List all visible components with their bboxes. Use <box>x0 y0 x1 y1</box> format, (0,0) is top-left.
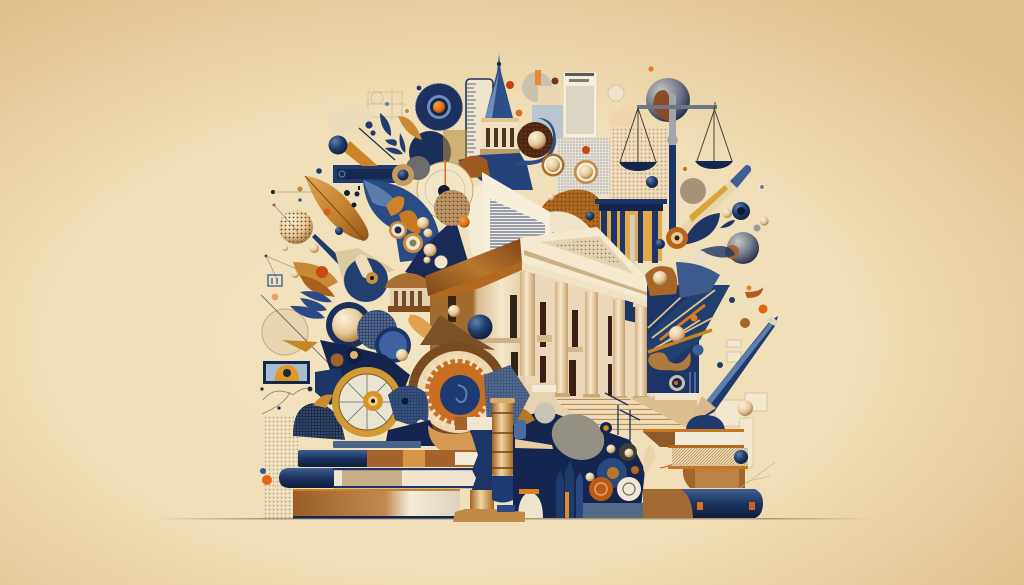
ring sphere left <box>542 154 564 176</box>
ring disc <box>403 233 423 253</box>
radial fan left <box>335 248 395 288</box>
book D <box>643 489 763 518</box>
book small centre <box>455 417 493 430</box>
book page left <box>482 172 550 258</box>
ball: cream right <box>759 216 769 226</box>
bronze crest <box>458 156 490 178</box>
dot blue <box>260 468 266 474</box>
cream round <box>692 250 708 266</box>
courthouse <box>425 227 697 440</box>
ring backdrop <box>262 309 308 355</box>
navy ball <box>655 239 665 249</box>
navy block <box>647 285 699 393</box>
ground line <box>155 518 875 520</box>
capsule <box>408 315 441 343</box>
gavel neck <box>470 490 494 512</box>
stairs <box>555 397 690 432</box>
cream ball <box>669 326 685 342</box>
sphere speckled <box>279 210 313 244</box>
book text block <box>490 199 545 250</box>
cream ball lower <box>416 420 426 428</box>
gavel cap <box>490 398 515 403</box>
roof wood <box>425 238 524 296</box>
dot: red mid <box>582 146 590 154</box>
front windows <box>540 302 612 396</box>
ledges <box>537 335 583 352</box>
ring sphere <box>326 302 372 348</box>
icon: medallion <box>416 84 462 130</box>
tower with spire <box>480 54 520 157</box>
dark wedge <box>405 218 470 280</box>
ball cream <box>448 305 460 317</box>
eye disc <box>389 221 407 239</box>
diagonal line <box>261 295 345 380</box>
leaf sprig <box>380 113 405 154</box>
dot: orange ring <box>515 109 523 117</box>
blue feather <box>363 180 440 262</box>
ball: navy page <box>586 212 594 220</box>
ball: dark lens <box>732 202 750 220</box>
column three <box>583 288 600 398</box>
small rotunda <box>385 273 432 312</box>
scatter dots <box>265 168 343 278</box>
dot: orange top right <box>648 66 654 72</box>
cream disk <box>417 160 473 218</box>
book four <box>293 489 460 518</box>
finial <box>497 62 501 66</box>
ink dome <box>686 415 725 429</box>
ball: cream <box>722 208 732 218</box>
thin lines <box>266 192 330 283</box>
ball: orbit small <box>682 166 688 172</box>
swirl with sphere <box>515 118 556 165</box>
gold scrap <box>313 394 333 408</box>
roof: blue folded <box>458 153 533 190</box>
checker scrap <box>344 186 360 208</box>
pediment cornice <box>520 227 657 306</box>
feathers fan <box>293 262 338 297</box>
book stack left <box>279 417 493 518</box>
burst <box>648 285 730 362</box>
column two <box>553 278 570 397</box>
left pan <box>619 108 657 171</box>
book top slim <box>333 441 421 448</box>
courthouse side wall <box>430 250 525 395</box>
paper: behind right books <box>735 418 753 470</box>
side ledge <box>480 338 525 343</box>
dots right <box>690 286 768 368</box>
dot: small cream <box>548 194 554 200</box>
dark mid <box>320 340 410 400</box>
dark semicircle <box>293 403 345 440</box>
patch: blue geometric <box>532 105 564 145</box>
book two <box>298 450 492 467</box>
balls stack <box>417 216 470 269</box>
book B <box>668 448 748 469</box>
wire dots <box>260 387 312 410</box>
front wall <box>525 260 650 400</box>
book page right <box>550 211 593 236</box>
round navy <box>597 458 627 488</box>
book stack right <box>643 429 775 518</box>
left cluster <box>265 86 473 302</box>
landing <box>630 393 697 428</box>
sketch: faint grid <box>365 88 405 120</box>
dot ring <box>271 293 279 301</box>
drum base <box>480 149 520 157</box>
navy lump <box>315 368 348 405</box>
big feather <box>305 176 369 241</box>
navy bar <box>333 165 399 183</box>
drum windows <box>486 128 514 147</box>
leaf brown <box>398 116 422 140</box>
book back leaf <box>463 185 484 255</box>
ball orange <box>589 477 613 501</box>
ball: navy <box>646 176 658 188</box>
cream sweep <box>513 408 535 430</box>
navy mass <box>513 410 645 518</box>
column five <box>633 303 649 400</box>
blue blob <box>676 262 720 298</box>
gavel base <box>453 509 525 522</box>
icon: line circle <box>608 85 624 101</box>
spire <box>485 54 513 118</box>
ball: grey small <box>754 224 760 232</box>
scale backdrop sphere <box>646 78 690 122</box>
ball navy <box>468 314 492 340</box>
ball: cream by pen <box>737 400 753 416</box>
dot: brown top <box>552 78 558 84</box>
grey ball <box>406 156 430 180</box>
document page <box>563 72 597 138</box>
tympanum <box>540 236 634 274</box>
column four <box>611 296 627 400</box>
gavel arm <box>515 439 553 449</box>
navy globe <box>344 253 388 302</box>
orange sweep <box>428 425 480 452</box>
curly wire <box>262 388 310 414</box>
bronze mound <box>537 190 606 232</box>
lower left cluster <box>260 291 530 518</box>
side windows <box>448 295 518 376</box>
railing <box>605 393 640 440</box>
cluster: dome texture <box>443 130 467 170</box>
texture grid <box>357 310 397 350</box>
gavel foot <box>492 476 513 502</box>
block sticks <box>690 372 695 393</box>
brown shell <box>648 352 691 371</box>
disc bronze <box>330 354 344 366</box>
dots small navy <box>365 86 421 136</box>
cream cup <box>518 492 543 518</box>
right pan <box>695 102 733 169</box>
scale beam <box>637 105 717 109</box>
leaves: navy right <box>682 213 735 258</box>
dots stipple <box>262 415 300 518</box>
scale post <box>669 98 676 230</box>
gavel head <box>492 398 513 476</box>
dot: red top <box>506 81 514 89</box>
paper scraps <box>715 340 767 426</box>
navy frieze <box>525 270 650 326</box>
gear <box>375 327 411 363</box>
orange soffit <box>428 262 522 298</box>
lower centre cluster <box>513 402 695 518</box>
dot orange <box>262 475 272 485</box>
book A <box>643 429 744 448</box>
orange cuff <box>519 489 539 494</box>
frame icon <box>263 361 310 384</box>
left terrace stair <box>500 382 575 425</box>
gear orange <box>666 227 688 249</box>
blue lens <box>392 164 414 186</box>
gavel <box>453 398 525 522</box>
dome: navy circle <box>409 131 451 173</box>
book three <box>279 468 476 488</box>
tower drum <box>481 118 519 123</box>
scales of justice <box>619 78 733 230</box>
panel: background paper layer <box>326 70 668 203</box>
ball spiral <box>617 477 641 501</box>
disk: grey with orange tab <box>522 70 560 120</box>
open book <box>463 172 593 258</box>
wedge orange <box>282 340 318 352</box>
ball: brown fuzzy <box>680 178 706 204</box>
ball: large grey <box>725 232 759 264</box>
petals orange <box>386 196 421 234</box>
pen upper <box>680 165 751 235</box>
icon: blue square <box>268 275 282 286</box>
entablature shadow <box>524 250 652 297</box>
disc small <box>346 347 362 363</box>
leaves blue <box>290 291 332 319</box>
dark band <box>385 420 440 446</box>
dome grey <box>544 406 612 468</box>
arched ring <box>408 342 508 442</box>
hammer head ball <box>534 402 556 424</box>
sketch lines <box>740 462 775 488</box>
patch: peach lined paper <box>610 100 668 203</box>
clock <box>332 367 402 437</box>
ball small <box>586 472 594 482</box>
lens disc <box>669 375 685 391</box>
book C <box>683 469 745 488</box>
pencils <box>556 461 583 518</box>
gavel bands <box>492 413 513 468</box>
navy stick <box>312 234 345 266</box>
navy temple <box>595 199 667 265</box>
column one <box>520 272 535 376</box>
sprig stem <box>359 128 395 160</box>
blue fan gear <box>388 386 428 430</box>
icon: ruler <box>466 79 493 161</box>
small post <box>514 420 526 439</box>
lump textured <box>434 190 470 226</box>
mallet orange <box>328 136 378 166</box>
ball: pale dot <box>759 184 765 190</box>
big pen <box>688 316 778 426</box>
textured sweep <box>420 315 495 350</box>
navy foot <box>583 503 643 518</box>
right cluster <box>645 227 768 426</box>
target <box>600 422 612 434</box>
brown ring <box>645 266 677 296</box>
ring sphere right <box>574 160 598 184</box>
sketch: fan <box>326 106 375 135</box>
cluster curls <box>606 443 695 475</box>
gavel navy pedestal <box>470 430 492 505</box>
patch: halftone grey <box>557 138 611 194</box>
blue textured wedge <box>484 365 530 425</box>
